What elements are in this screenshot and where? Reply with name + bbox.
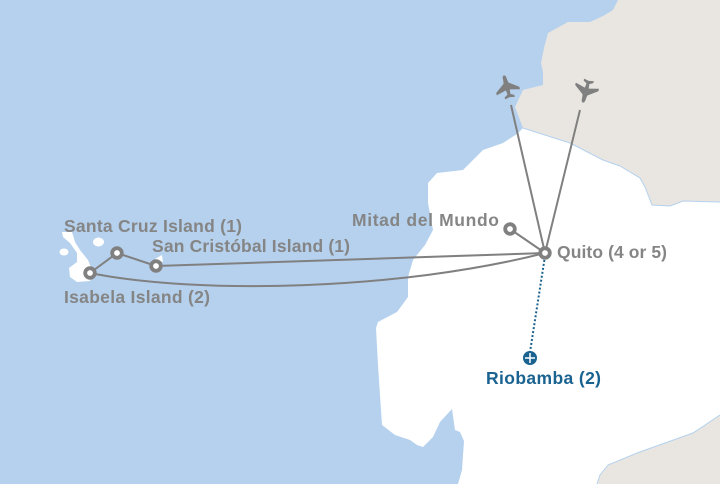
marker: Isabela Island (85, 268, 95, 278)
route: Isabela to Santa Cruz (90, 253, 117, 273)
route: Mitad del Mundo to Quito (510, 229, 545, 253)
San Cristobal landmass (155, 255, 163, 262)
Isabela Island landmass (62, 232, 93, 282)
route: Isabela to Quito (90, 253, 545, 286)
icon: plane departing (492, 72, 522, 101)
route: San Cristobal to Quito (156, 253, 545, 266)
label: Mitad del Mundo: Mitad del Mundo (352, 210, 499, 230)
marker: Santa Cruz Island (112, 248, 122, 258)
route lines (90, 105, 580, 286)
label: Riobamba: Riobamba (2) (486, 368, 601, 388)
route: flight northwest (511, 105, 545, 253)
label: Santa Cruz Island: Santa Cruz Island (1) (64, 216, 242, 236)
marker: San Cristobal Island (151, 261, 161, 271)
icon: plane arriving (571, 77, 601, 106)
route: flight northeast (545, 110, 580, 253)
border line north (523, 128, 720, 206)
mainland Ecuador (376, 128, 720, 484)
marker: Riobamba (523, 351, 537, 365)
neighbouring land south (597, 415, 720, 484)
small island west (60, 248, 68, 256)
label: Quito: Quito (4 or 5) (557, 242, 667, 262)
dotted route to Riobamba (530, 256, 545, 352)
small island north (93, 238, 104, 246)
neighbouring land north (515, 0, 720, 206)
marker: Mitad del Mundo (505, 224, 515, 234)
border line south (597, 415, 720, 484)
route: Santa Cruz to San Cristobal (117, 253, 156, 266)
label: San Cristobal Island: San Cristóbal Island (1) (152, 236, 350, 256)
marker: Quito (540, 248, 550, 258)
label: Isabela Island: Isabela Island (2) (64, 287, 210, 307)
